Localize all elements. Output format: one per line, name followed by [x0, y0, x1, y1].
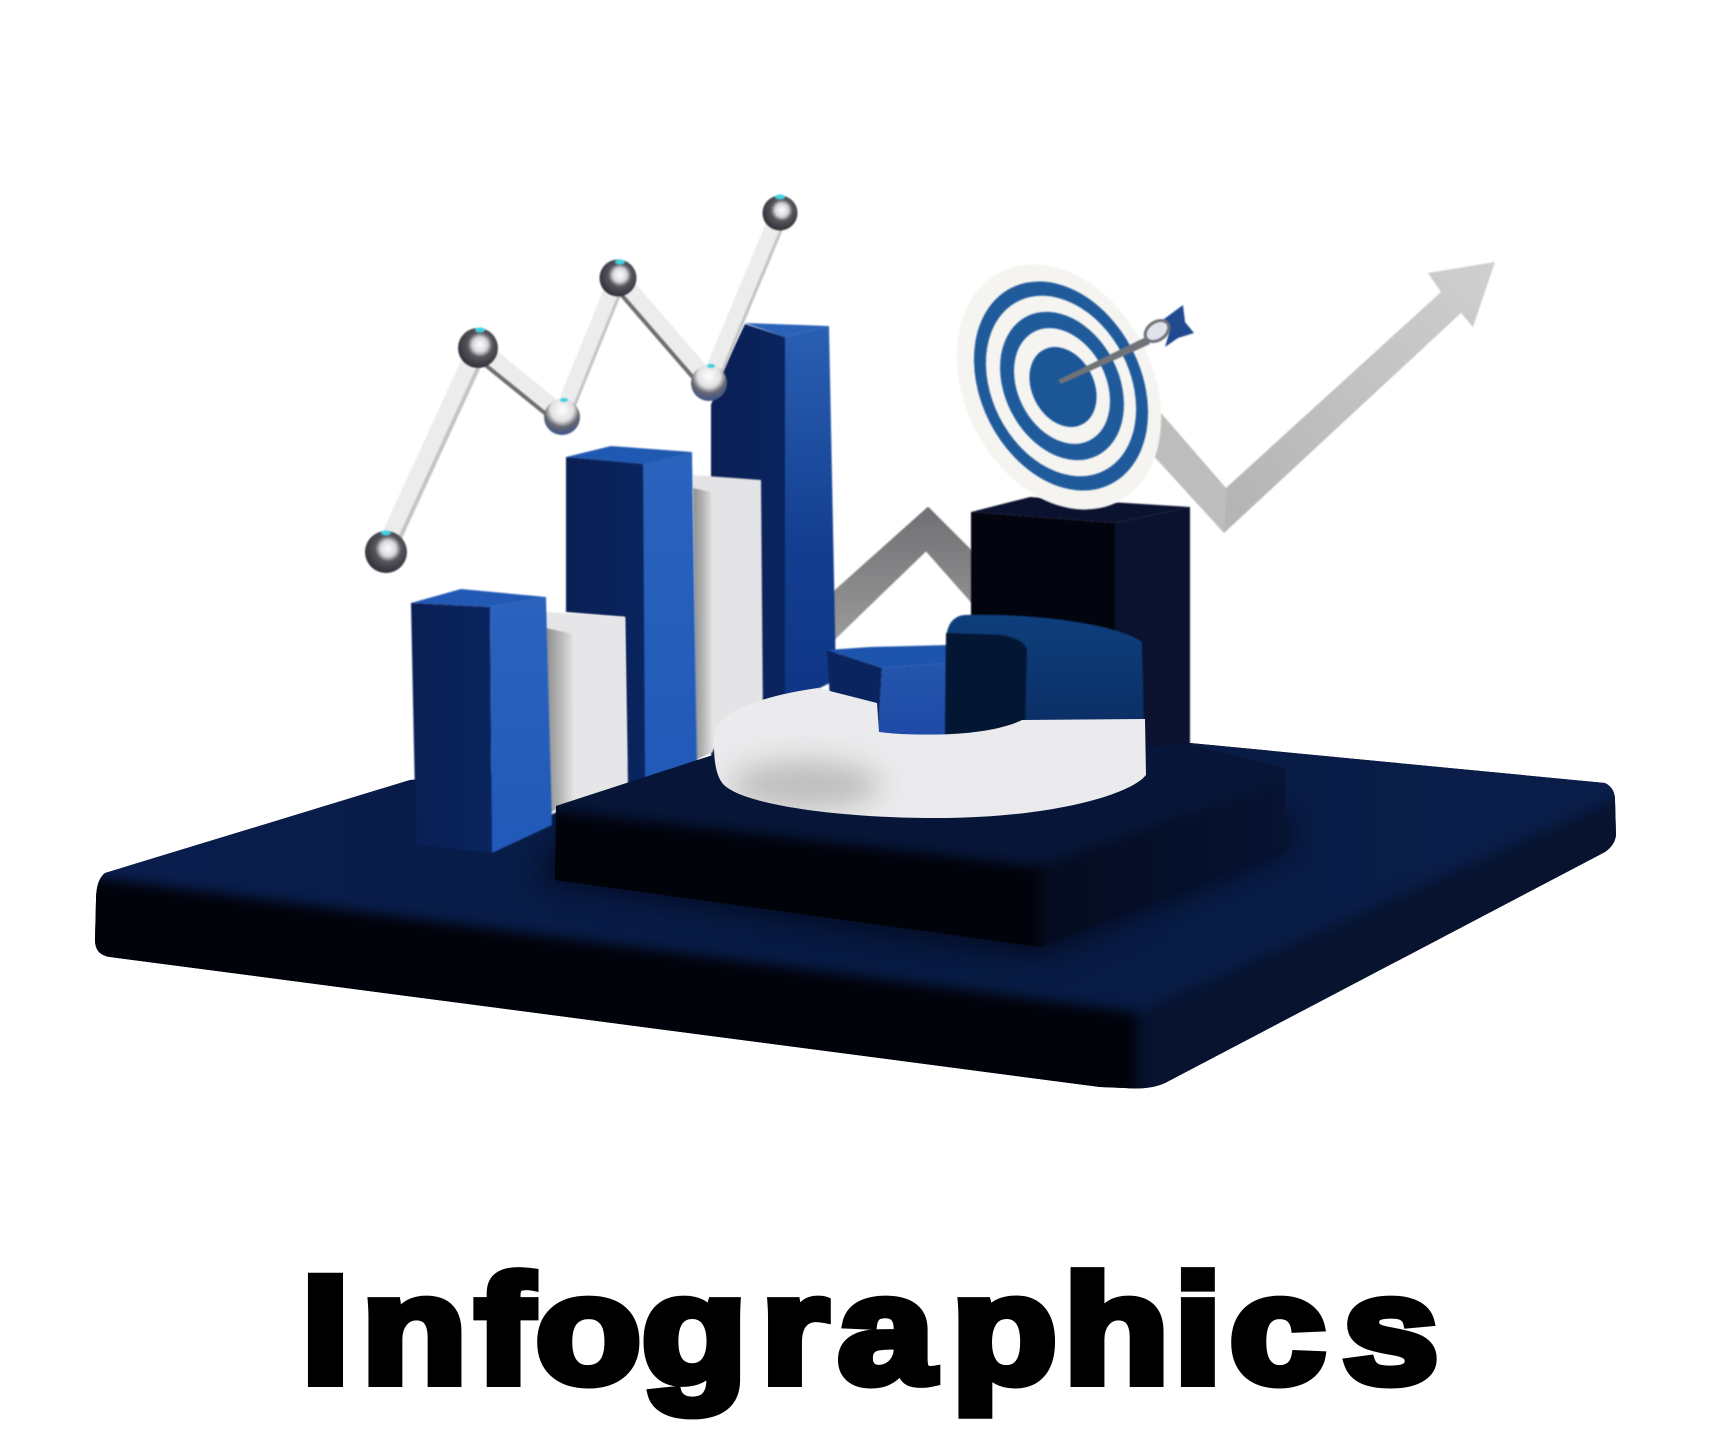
- target: white disc: [917, 229, 1201, 545]
- white bar 2: face: [693, 475, 763, 760]
- ring chart: side shading: [730, 761, 880, 809]
- raised step platform: [555, 745, 1285, 947]
- dart: fletching: [1160, 305, 1194, 347]
- pedestal: top: [971, 497, 1190, 523]
- line chart: point 4: [600, 260, 636, 296]
- base: shadow under step: [540, 810, 1290, 955]
- third blue bar: [711, 323, 836, 760]
- ring chart: white base: [714, 688, 1146, 818]
- line chart: point 6: [762, 194, 798, 230]
- line chart: [365, 194, 798, 573]
- bar 2: right face: [643, 452, 697, 780]
- target: inner white band: [995, 312, 1129, 460]
- base: front face: [95, 872, 1142, 1088]
- bar 3: dark face: [711, 324, 785, 760]
- target board: [917, 229, 1201, 545]
- base: shaded faces: [95, 743, 1616, 1088]
- bar 2: top: [566, 446, 692, 464]
- base: right face: [1138, 794, 1616, 1088]
- ring chart: white segment: [714, 688, 1146, 818]
- dart: shaft: [1058, 337, 1150, 384]
- bar 3: top: [745, 323, 829, 337]
- target: bullseye: [1016, 336, 1110, 438]
- white bar 1: shaded side: [546, 628, 574, 812]
- pedestal: left face: [971, 512, 1115, 745]
- line chart: point 5: [691, 364, 727, 401]
- infographic illustration: [95, 194, 1616, 1420]
- line chart: point 2: [458, 328, 498, 368]
- ring chart: [705, 615, 1155, 825]
- bar 2: dark face: [566, 457, 646, 785]
- base platform: [95, 743, 1616, 1088]
- ring chart: small blue segment: [827, 645, 948, 735]
- bar 1: right face: [490, 597, 552, 853]
- step: shaded faces: [555, 745, 1285, 946]
- base: silhouette fill: [80, 730, 1640, 1100]
- line chart: rods: [386, 213, 787, 551]
- target: inner ring: [976, 291, 1148, 481]
- bar 1: dark face: [411, 603, 492, 853]
- white bar 1: face: [545, 612, 628, 815]
- arrow: right segment and head: [1150, 262, 1495, 533]
- line chart: point 1: [365, 530, 407, 573]
- title: Infographics: [301, 1244, 1439, 1415]
- rising arrow: [833, 262, 1495, 640]
- dart in target: [1058, 305, 1194, 384]
- target: outer white band: [956, 270, 1166, 502]
- base: top face: [98, 743, 1616, 1017]
- ring chart: dark blue segment: [945, 615, 1144, 736]
- second white bar: [693, 475, 763, 760]
- step: silhouette fill: [556, 745, 1284, 856]
- step: front face: [555, 818, 1038, 946]
- pedestal: right face: [1115, 507, 1190, 750]
- step: top face: [556, 745, 1285, 870]
- pedestal under target: [971, 497, 1190, 750]
- dart: ring: [1141, 316, 1173, 346]
- white bar 2: shaded side: [693, 488, 713, 760]
- target: outer ring: [940, 252, 1182, 520]
- step: right face: [1050, 778, 1285, 942]
- arrow: left segment: [833, 508, 972, 640]
- first blue bar: [411, 589, 552, 853]
- line chart: point 3: [544, 398, 580, 435]
- first white bar: [545, 612, 628, 815]
- bar 3: right face: [785, 326, 836, 705]
- second blue bar: [566, 446, 697, 785]
- bar 1: top: [411, 589, 546, 607]
